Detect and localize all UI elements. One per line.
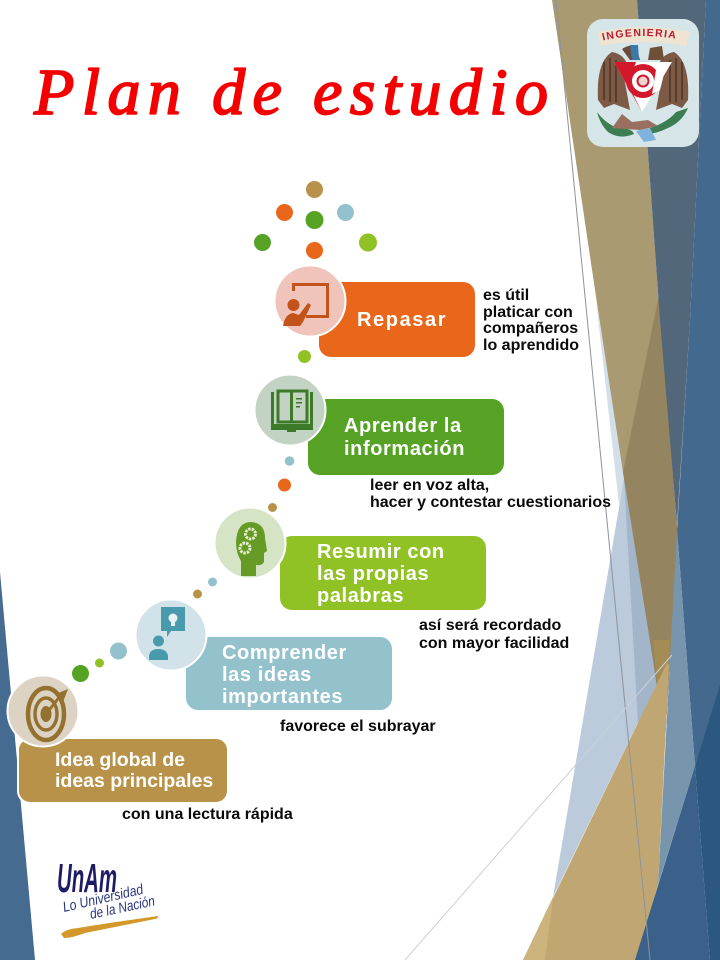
label: Aprender: Aprender la bbox=[344, 415, 462, 437]
label: Comprender: Comprender bbox=[222, 642, 347, 664]
label: Comprender: las ideas bbox=[222, 664, 312, 686]
logo: UNAM: Lo Universidad bbox=[61, 882, 146, 916]
note: Repasar: es útil bbox=[483, 287, 529, 304]
label: Resumir: las propias bbox=[317, 563, 429, 585]
label: Idea global: Idea global de bbox=[55, 749, 185, 771]
logo: UNAM: UnAm bbox=[57, 857, 117, 901]
icon: target with arrow bbox=[28, 688, 68, 740]
note: Comprender: favorece el subrayar bbox=[280, 718, 436, 735]
logo: Ingeniería emblem bbox=[587, 19, 699, 147]
note: Idea global: con una lectura rápida bbox=[122, 806, 293, 823]
note: Repasar: lo aprendido bbox=[483, 337, 579, 354]
title: Plan de estudio bbox=[33, 56, 548, 129]
icon: teacher at board bbox=[283, 283, 329, 326]
icon: open book bbox=[271, 390, 313, 432]
label: Aprender: información bbox=[344, 438, 465, 460]
note: Repasar: platicar con bbox=[483, 304, 573, 321]
label: Idea global: ideas principales bbox=[55, 770, 213, 792]
step 4: Aprender bbox=[254, 374, 504, 475]
logo: UNAM bbox=[57, 857, 158, 938]
note: Resumir: así será recordado bbox=[419, 617, 562, 634]
step 3: Resumir bbox=[214, 508, 486, 610]
note: Repasar: compañeros bbox=[483, 320, 578, 337]
background: left blue wedge bbox=[0, 572, 35, 960]
connecting dots bbox=[72, 350, 311, 682]
label: Resumir: Resumir con bbox=[317, 541, 445, 563]
step 2: Comprender bbox=[136, 600, 392, 710]
step 5: Repasar bbox=[274, 266, 475, 357]
logo: Ingeniería emblem: INGENIERIA bbox=[602, 28, 676, 40]
background: right faceted shapes bbox=[405, 0, 720, 960]
label: Comprender: importantes bbox=[222, 686, 343, 708]
logo: UNAM: de la Nación bbox=[89, 894, 156, 923]
top dots cluster bbox=[254, 181, 377, 259]
icon: person with idea bbox=[149, 607, 185, 660]
note: Aprender: hacer y contestar cuestionarios bbox=[370, 494, 611, 511]
step 1: Idea global bbox=[8, 676, 228, 803]
label: Repasar: Repasar bbox=[357, 309, 447, 331]
icon: head with gears bbox=[236, 522, 267, 576]
label: Resumir: palabras bbox=[317, 585, 404, 607]
note: Aprender: leer en voz alta, bbox=[370, 477, 489, 494]
note: Resumir: con mayor facilidad bbox=[419, 635, 569, 652]
